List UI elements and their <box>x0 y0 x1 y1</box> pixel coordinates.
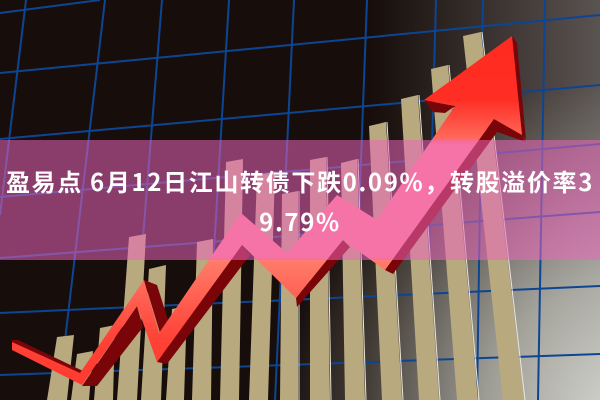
red arrow <box>12 36 526 386</box>
title <box>6 163 594 238</box>
title: 9.79% <box>259 203 341 238</box>
bars <box>47 32 525 400</box>
arrow shadow side <box>12 36 526 386</box>
title: 盈易点 6月12日江山转债下跌0.09%，转股溢价率3 <box>6 163 594 198</box>
translucent pink title band <box>0 140 600 260</box>
arrow face <box>12 36 522 385</box>
